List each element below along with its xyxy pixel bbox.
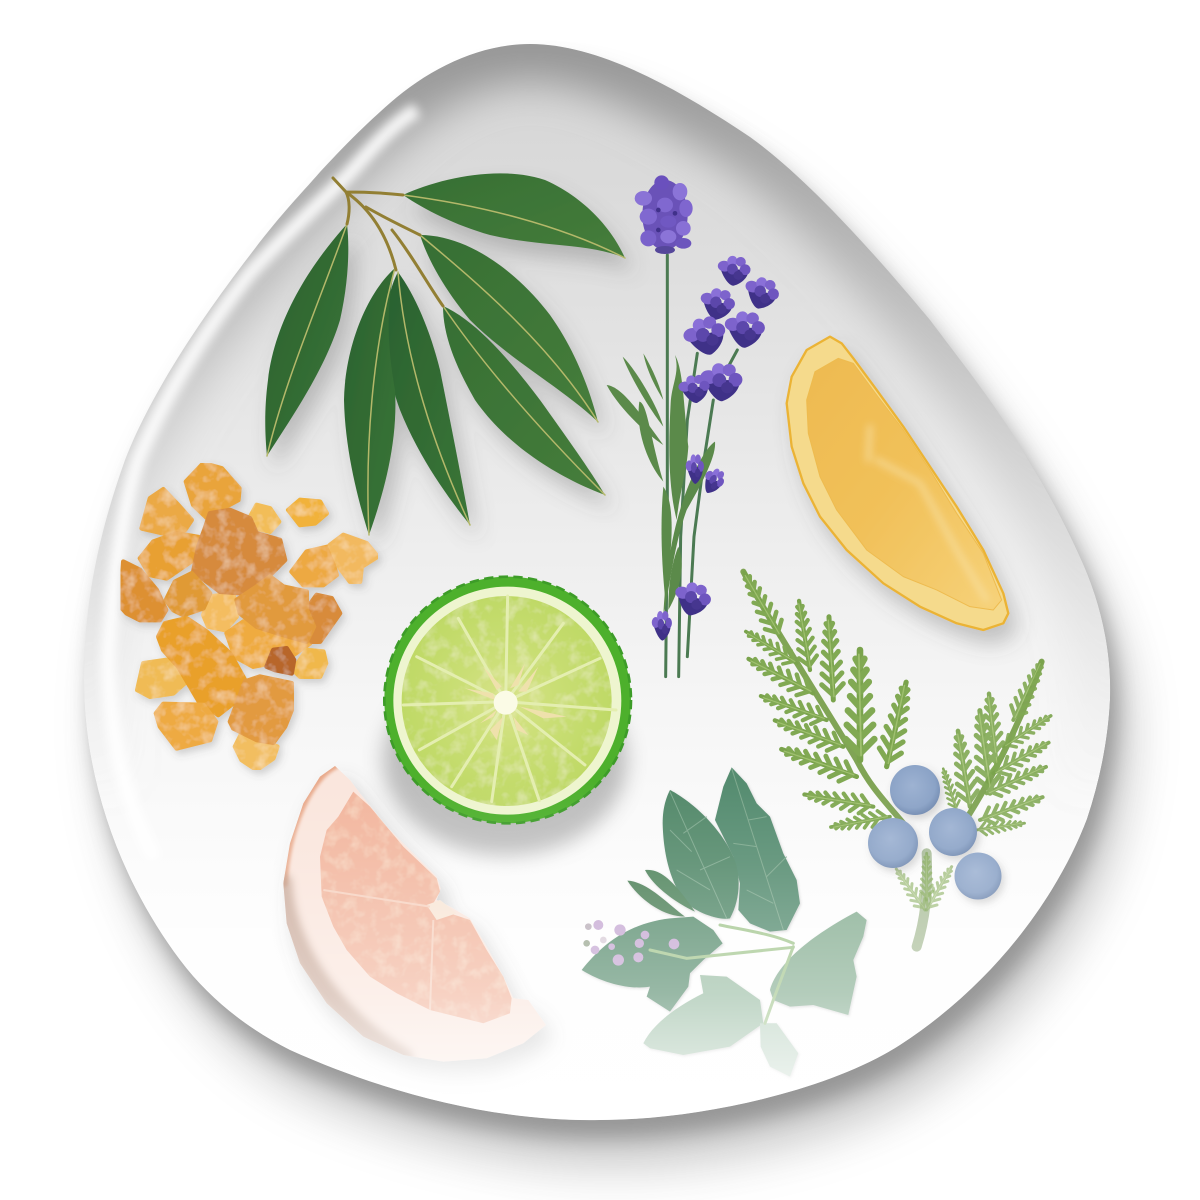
lemon flesh	[807, 358, 1002, 610]
bergamot pith	[393, 587, 621, 815]
lavender bouquet	[607, 175, 783, 677]
bergamot shadow	[383, 664, 627, 856]
bottom fade overlay	[177, 807, 1036, 1120]
lemon membrane highlight	[868, 427, 987, 600]
eucalyptus branch	[265, 173, 625, 535]
bergamot rind	[384, 577, 631, 823]
lemon rind	[787, 337, 1008, 630]
mint leaf veins	[670, 768, 787, 930]
thuja left frond	[736, 568, 917, 835]
eucalyptus twig	[333, 178, 443, 306]
eucalyptus leaves	[265, 173, 625, 535]
mint stems	[650, 925, 793, 1023]
bergamot centre	[465, 663, 567, 740]
bergamot slice	[384, 577, 631, 823]
thuja lower stem	[891, 853, 957, 947]
plate dish surface	[84, 44, 1110, 1120]
lavender flower heads	[635, 175, 783, 641]
bergamot segment lines	[403, 596, 616, 802]
mint sprig	[582, 767, 867, 1077]
lavender stems	[666, 255, 737, 677]
mint blossoms	[583, 920, 679, 966]
plate	[84, 44, 1110, 1120]
grapefruit outer skin	[282, 765, 403, 1058]
plate shadow	[92, 62, 1130, 1166]
grapefruit wedge	[282, 765, 546, 1062]
thuja right frond	[938, 658, 1055, 836]
plate rim highlight	[108, 110, 417, 860]
large lavender head	[635, 175, 693, 254]
grapefruit rind	[283, 766, 546, 1062]
thuja sprigs	[736, 568, 1055, 947]
resin chunks	[121, 463, 378, 770]
grapefruit flesh	[320, 792, 512, 1023]
juniper berries	[868, 765, 1002, 900]
thuja spines	[743, 572, 1042, 843]
lemon wedge	[787, 337, 1008, 630]
lavender leaves	[607, 353, 715, 617]
eucalyptus midribs	[267, 195, 625, 535]
plate rim shading	[84, 44, 1109, 676]
grapefruit centre membrane	[427, 900, 457, 920]
mint leaves	[582, 767, 867, 1077]
bergamot flesh	[402, 596, 612, 806]
